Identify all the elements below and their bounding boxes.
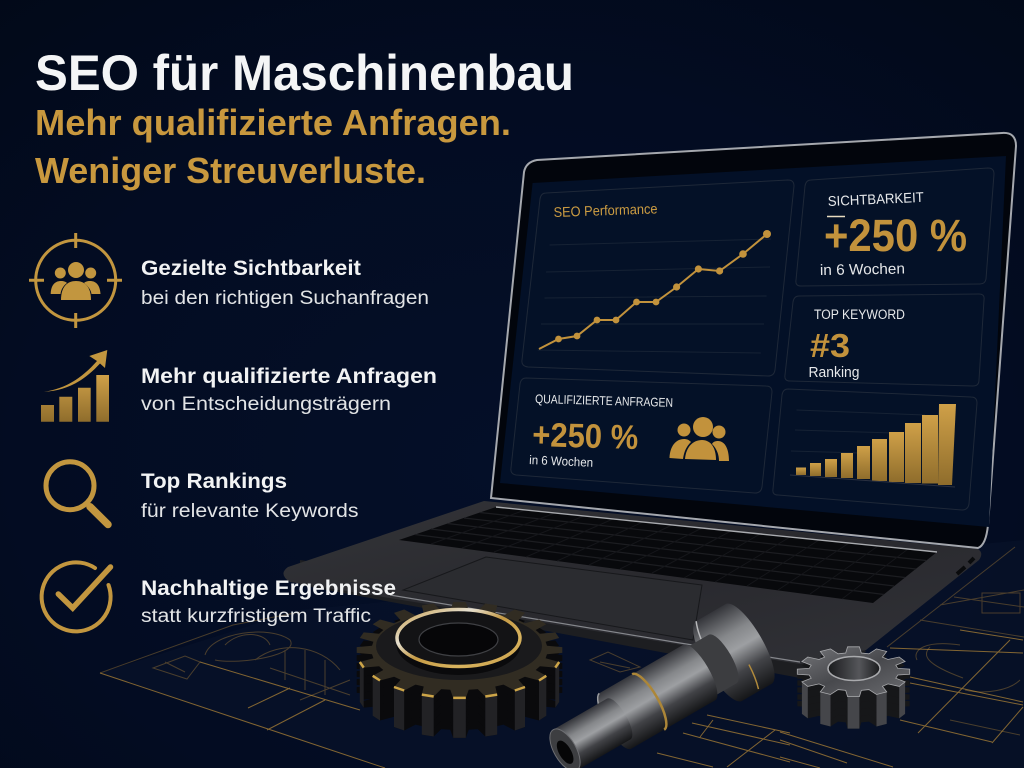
metric: +250 % bbox=[824, 210, 967, 261]
laptop bbox=[283, 133, 1016, 678]
screen bezel bbox=[491, 133, 1016, 548]
icon: people bbox=[670, 417, 729, 461]
gear hub bbox=[396, 615, 520, 675]
small gear front tooth faces bbox=[802, 682, 905, 729]
blueprint drawing lines bbox=[100, 547, 1024, 768]
screen bbox=[500, 156, 1006, 527]
shaft bore bbox=[553, 738, 577, 766]
metric: +250 % bbox=[532, 416, 639, 457]
side ports bbox=[957, 558, 974, 574]
feature 1 heading: Gezielte Sichtbarkeit bbox=[141, 256, 361, 280]
panel: SEO performance chart bbox=[522, 180, 794, 376]
bars bbox=[796, 404, 956, 485]
icon: check circle bbox=[42, 562, 111, 631]
icon: magnifier bbox=[46, 462, 108, 524]
large gear bbox=[357, 602, 562, 738]
rank: #3 bbox=[810, 327, 850, 364]
title: SEO für Maschinenbau bbox=[35, 45, 574, 101]
flange bbox=[684, 597, 784, 708]
panel: Qualifizierte Anfragen bbox=[511, 378, 772, 493]
laptop base deck bbox=[283, 501, 981, 664]
subtitle line 1: Mehr qualifizierte Anfragen. bbox=[35, 102, 511, 143]
gear tooth face bbox=[357, 602, 562, 698]
shaft neck bbox=[673, 630, 744, 704]
gear top face bbox=[376, 612, 542, 680]
laptop base underside bbox=[300, 560, 866, 678]
blueprint sheet bbox=[100, 540, 1024, 768]
feature 2 heading: Mehr qualifizierte Anfragen bbox=[141, 364, 437, 388]
label: QUALIFIZIERTE ANFRAGEN bbox=[535, 392, 673, 410]
small gear bbox=[797, 647, 910, 729]
small gear bore bbox=[828, 656, 880, 680]
small gear extrusion bbox=[797, 651, 910, 729]
period: in 6 Wochen bbox=[820, 261, 905, 279]
panel: Sichtbarkeit bbox=[796, 168, 994, 286]
feature 1 text: bei den richtigen Suchanfragen bbox=[141, 288, 429, 309]
small gear face bbox=[797, 647, 910, 697]
feature 4 text: statt kurzfristigem Traffic bbox=[141, 606, 371, 627]
shaft end face bbox=[544, 724, 586, 768]
shaft end section bbox=[544, 695, 637, 768]
small spark mark bbox=[827, 216, 845, 218]
period: in 6 Wochen bbox=[529, 453, 593, 470]
panel: Top Keyword bbox=[785, 294, 984, 386]
gear front tooth faces bbox=[360, 662, 559, 738]
icon: growth chart with arrow bbox=[41, 350, 109, 422]
panel: bar chart bbox=[773, 389, 977, 510]
line chart bbox=[539, 230, 771, 349]
gear bore bbox=[419, 623, 498, 656]
icon: target with people bbox=[29, 233, 122, 328]
feature 3 text: für relevante Keywords bbox=[141, 501, 358, 522]
feature 2 text: von Entscheidungsträgern bbox=[141, 394, 391, 415]
label: SICHTBARKEIT bbox=[827, 189, 924, 209]
shaft main section bbox=[591, 640, 724, 754]
chart title: SEO Performance bbox=[553, 200, 658, 220]
base front highlight bbox=[390, 595, 800, 662]
keyboard bbox=[399, 507, 937, 603]
subtitle line 2: Weniger Streuverluste. bbox=[35, 150, 426, 191]
feature 4 heading: Nachhaltige Ergebnisse bbox=[141, 576, 396, 600]
rank label: Ranking bbox=[808, 364, 860, 381]
shaft bbox=[532, 597, 784, 768]
trackpad bbox=[403, 557, 702, 640]
gear extrusion bbox=[357, 610, 562, 738]
feature 3 heading: Top Rankings bbox=[141, 469, 287, 493]
gear gold tooth edges bbox=[360, 662, 559, 698]
label: TOP KEYWORD bbox=[814, 307, 905, 322]
